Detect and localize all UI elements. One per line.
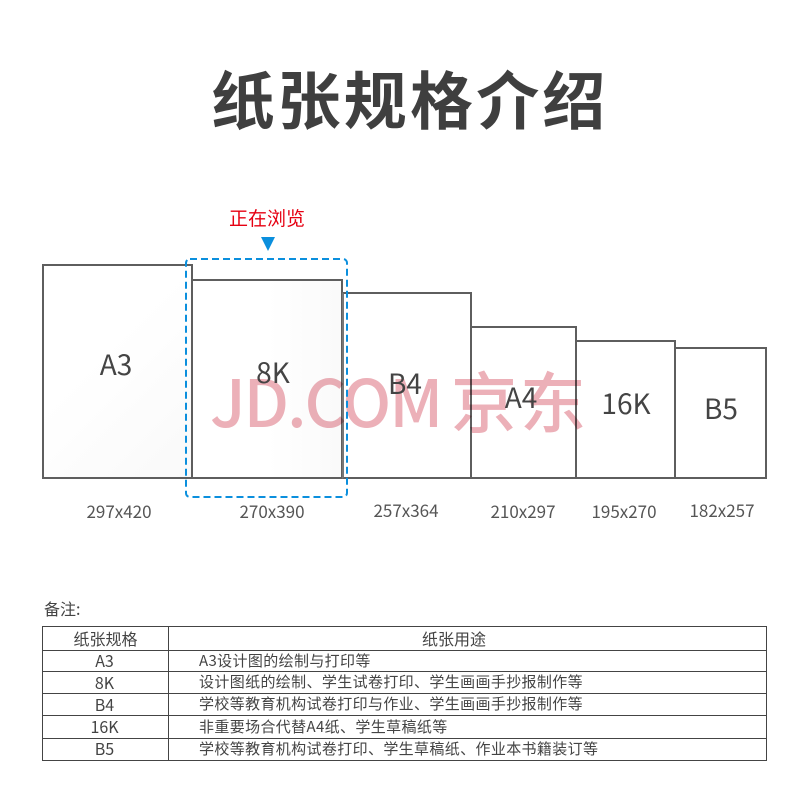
paper: A3 xyxy=(42,264,193,479)
row: 16K xyxy=(43,716,766,739)
name: A4: A4 xyxy=(505,377,537,417)
name: 8K: 8K xyxy=(256,352,290,392)
cell: B4 name: B4 xyxy=(95,692,114,716)
size: B5: 182x257 xyxy=(689,497,755,522)
cell: B4 use: 学校等教育机构试卷打印与作业、学生画画手抄报制作等 xyxy=(199,693,583,714)
watermark: JD.COM xyxy=(210,352,441,446)
header: paper use: 纸张用途 xyxy=(422,626,486,650)
name: 16K: 16K xyxy=(601,383,651,423)
watermark: 京东 xyxy=(451,351,589,447)
label: currently viewing: 正在浏览 xyxy=(229,204,305,231)
cell: B5 name: B5 xyxy=(95,736,114,760)
paper: A4 xyxy=(470,326,577,479)
cell: 16K name: 16K xyxy=(90,714,119,738)
cell: A3 use: A3设计图的绘制与打印等 xyxy=(199,650,371,671)
cell: 8K name: 8K xyxy=(95,670,114,694)
row: A3 xyxy=(43,651,766,672)
size: 16K: 195x270 xyxy=(591,498,657,523)
paper: 8K xyxy=(191,279,343,479)
name: B5: B5 xyxy=(704,388,738,428)
title: 纸张规格介绍 xyxy=(211,52,609,143)
dashed highlight frame xyxy=(185,258,348,498)
cell: B5 use: 学校等教育机构试卷打印、学生草稿纸、作业本书籍装订等 xyxy=(199,738,598,759)
table: paper uses xyxy=(42,626,767,761)
cell: 16K use: 非重要场合代替A4纸、学生草稿纸等 xyxy=(199,716,448,737)
paper: B5 xyxy=(674,347,767,479)
size: A4: 210x297 xyxy=(490,498,556,523)
size: B4: 257x364 xyxy=(373,497,439,522)
size: A3: 297x420 xyxy=(86,498,152,523)
row: header xyxy=(43,627,766,651)
note heading: 备注: xyxy=(44,596,80,620)
size: 8K: 270x390 xyxy=(239,498,305,523)
watermark xyxy=(210,351,589,447)
name: B4: B4 xyxy=(388,363,422,403)
header: paper size: 纸张规格 xyxy=(73,626,138,650)
row: B5 xyxy=(95,736,598,760)
name: A3: A3 xyxy=(100,344,132,384)
paper: B4 xyxy=(342,292,472,479)
cell: A3 name: A3 xyxy=(95,648,114,672)
cell: 8K use: 设计图纸的绘制、学生试卷打印、学生画画手抄报制作等 xyxy=(199,671,583,692)
row: B4 xyxy=(43,694,766,716)
icon: blue down arrow xyxy=(261,237,275,251)
paper: 16K xyxy=(575,340,676,479)
row: 8K xyxy=(43,672,766,694)
